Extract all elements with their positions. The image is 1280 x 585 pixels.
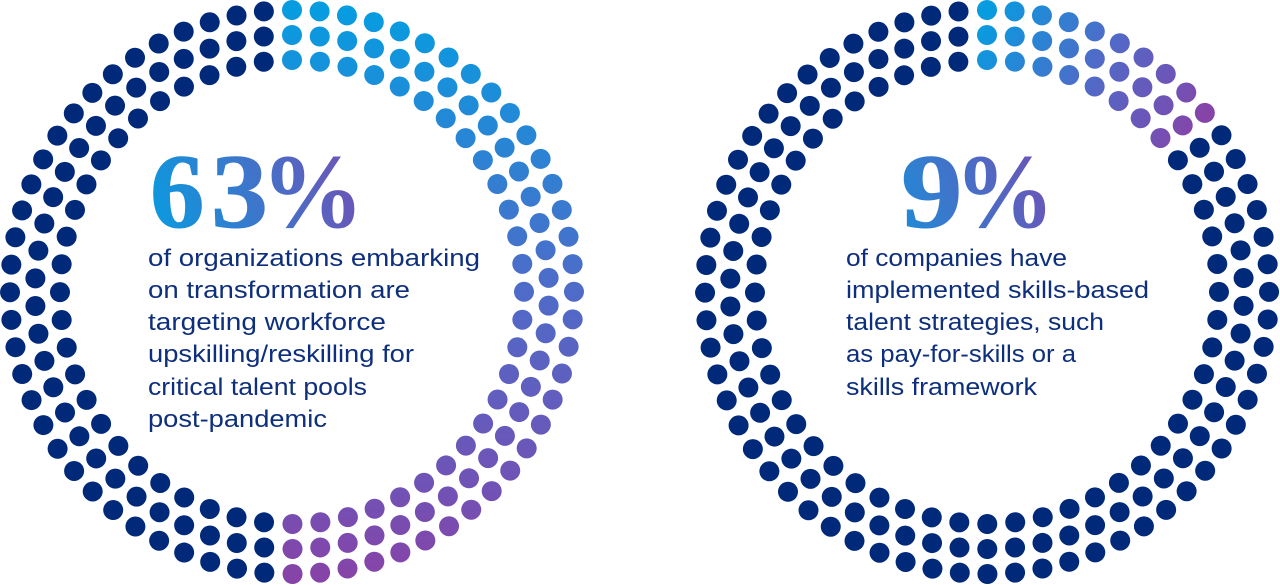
ring dark dots xyxy=(10,11,264,573)
ring dark dots xyxy=(705,11,1269,574)
ring coloured dots xyxy=(292,10,574,574)
description text: on transformation are xyxy=(148,277,410,304)
description text: of organizations embarking xyxy=(148,245,480,272)
description text: of companies have xyxy=(846,245,1067,272)
description text: skills framework xyxy=(846,374,1038,401)
description text: post-pandemic xyxy=(148,406,327,433)
description text: as pay-for-skills or a xyxy=(846,341,1076,368)
dotted ring: 9% xyxy=(705,10,1269,574)
description text: upskilling/reskilling for xyxy=(148,341,414,368)
big number 63%: 6 xyxy=(150,133,204,250)
dotted ring: 63% xyxy=(10,10,574,574)
description text: critical talent pools xyxy=(148,374,367,401)
panel: 9% statistic xyxy=(705,10,1269,574)
description text: talent strategies, such xyxy=(846,309,1104,336)
big number 9%: % xyxy=(954,133,1054,250)
description text: implemented skills-based xyxy=(846,277,1149,304)
panel: 63% statistic xyxy=(10,10,574,574)
ring coloured dots xyxy=(987,10,1205,138)
big number 63%: 3 xyxy=(211,133,268,250)
description text: targeting workforce xyxy=(148,309,386,336)
big number 9%: 9 xyxy=(901,133,962,250)
big number 63%: % xyxy=(261,133,364,250)
